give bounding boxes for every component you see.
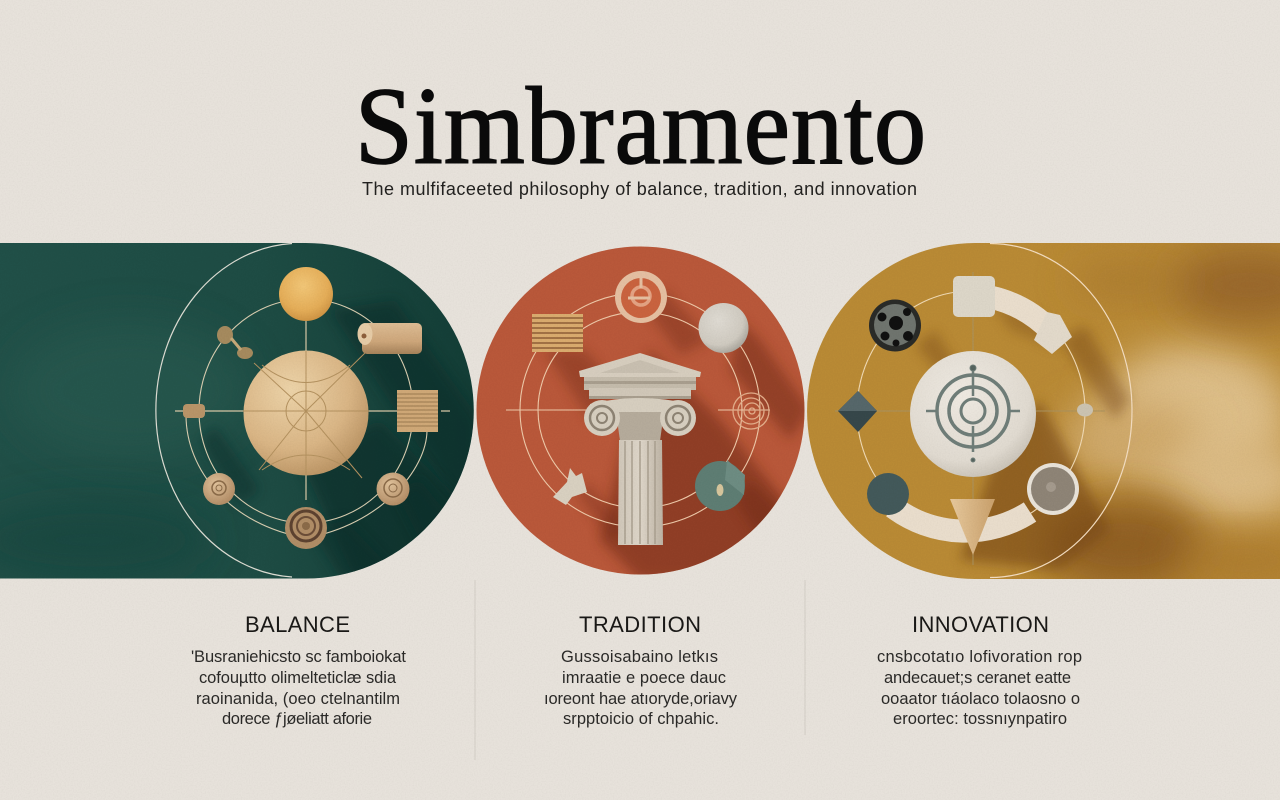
star shard [553,468,587,505]
cream cube [953,276,995,317]
green band and disc [0,243,480,590]
wooden triangle [950,499,995,555]
panel: tradition illustration [476,246,810,580]
body: 'Busraniehicsto sc famboiokat [191,648,406,666]
concentric disc bottom [285,507,327,549]
top sphere [279,267,333,321]
panel: balance illustration [0,243,480,590]
body: cnsbcotatıo lofivoration rop [877,648,1082,666]
body: srpptoicio of chpahic. [563,710,719,728]
heading: TRADITION [579,612,701,637]
body: cofouµtto olimelteticlæ sdia [199,669,397,687]
shaft [618,440,663,545]
stone sphere [698,303,748,353]
rosette [733,393,769,429]
concentric disc left [203,473,235,505]
ribbed block [397,390,438,432]
capital [590,398,690,425]
red disc [476,246,804,574]
fabric roll [358,323,422,354]
panel: innovation illustration [800,243,1280,590]
column: balance text [191,612,406,728]
concentric disc right [376,472,410,506]
central dome [243,350,369,478]
body [877,648,1082,728]
small knot left [183,404,205,418]
axis lines [835,272,1105,565]
dark diamond [838,391,877,432]
body [544,648,738,728]
medallion [615,271,667,323]
disc shadows [545,290,810,580]
title: Simbramento [355,66,926,188]
body: Gussoisabaino letkıs [561,648,718,666]
body: ıoreont hae atıoryde,oriavy [544,690,738,708]
column: innovation text [877,612,1082,728]
green faceted stone [695,460,745,511]
cream pentagon [1034,312,1072,354]
body: imraatie e poece dauc [562,669,726,687]
heading: BALANCE [245,612,350,637]
subtitle: The mulfifaceeted philosophy of balance, tradition, and innovation [362,179,917,199]
target symbol [926,365,1020,462]
outer ring [990,244,1132,578]
ribbed block [532,314,583,352]
ionic column [579,353,701,545]
divider left [474,580,476,760]
body: eroortec: tossnıynpatiro [893,710,1067,728]
outer ring [156,244,292,577]
orbit ring [857,291,1085,531]
heading: INNOVATION [912,612,1049,637]
dark faceted stone [867,473,909,515]
small grey dot [1077,404,1093,416]
pediment [579,353,701,377]
divider right [804,580,806,735]
ornament knots [217,326,253,359]
sand bowl [1027,463,1079,515]
cream arcs [893,297,1050,531]
body [191,648,406,728]
black perforated sphere [869,300,921,352]
body: dorece ƒjøeliatt aforie [222,710,372,728]
body: ooaator tıáolaco tolaosno o [881,690,1080,708]
orbit rings [186,299,427,538]
body: andecauet;s ceranet eatte [884,669,1071,687]
column: tradition text [544,612,738,728]
axis lines [175,320,450,500]
body: raoinanida, (oeo ctelnantilm [196,690,400,708]
orbit rings [506,293,770,527]
central dome [910,351,1036,477]
gold band and disc [800,243,1280,590]
